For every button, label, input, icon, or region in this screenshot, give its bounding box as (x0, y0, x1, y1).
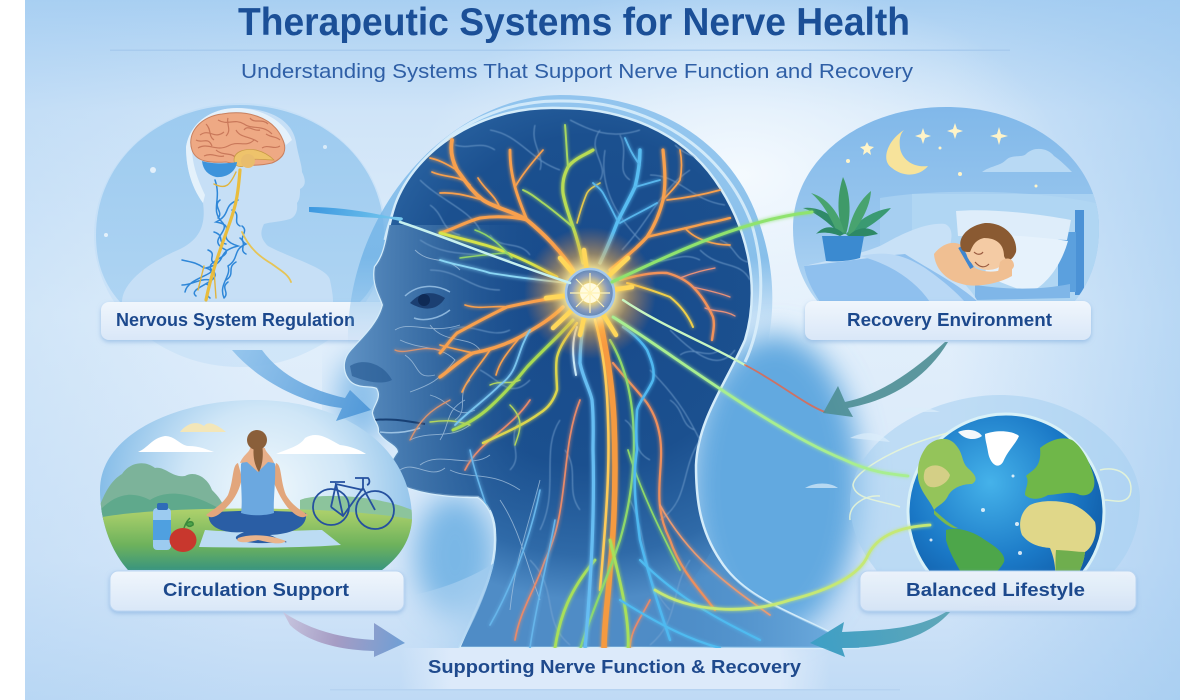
outer skull halo (348, 95, 772, 400)
moon (886, 130, 928, 175)
title divider (110, 50, 1010, 51)
apple (170, 518, 196, 552)
orbit lines (850, 433, 1131, 520)
cloud (982, 149, 1072, 172)
label: recovery environment (805, 301, 1091, 340)
nose and lip contours (350, 362, 392, 383)
blanket (804, 224, 978, 302)
subtitle: Understanding Systems That Support Nerve Function and Recovery (241, 60, 914, 83)
right shoulder shading (640, 550, 860, 648)
panel: circulation support (95, 395, 420, 611)
hub core ring (566, 269, 614, 317)
beam: second green into neck (623, 300, 745, 365)
clouds (180, 423, 226, 432)
green and yellow nerves (430, 125, 693, 650)
eye (410, 293, 445, 309)
label: circulation support (110, 571, 404, 611)
orange nerves (395, 140, 770, 650)
water bottle (153, 503, 171, 550)
bottom caption banner: Supporting Nerve Function & Recovery (428, 657, 801, 677)
beam: green to recovery (612, 212, 812, 282)
europe (1025, 438, 1094, 499)
label: balanced lifestyle: Balanced Lifestyle (906, 580, 1085, 600)
beam: pale blue into hub (400, 222, 570, 283)
human silhouette (122, 108, 333, 302)
hub glow (524, 227, 656, 359)
blue nerves (440, 138, 760, 650)
arrow: balanced to bottom (810, 612, 950, 657)
bottom caption banner (330, 648, 900, 690)
beam: blue to nervous panel (310, 208, 402, 220)
mattress (975, 284, 1070, 300)
plant (803, 177, 891, 238)
stars (846, 123, 1038, 188)
spinal nerves (182, 170, 291, 300)
sleeping person (934, 243, 1012, 286)
meditating figure (206, 430, 308, 543)
scene circle (790, 100, 1102, 310)
label: circulation support: Circulation Support (163, 580, 349, 600)
scene circle (94, 103, 386, 367)
pillows (956, 210, 1071, 240)
panel: recovery environment (790, 100, 1102, 340)
panel: balanced lifestyle (805, 395, 1140, 611)
label: nervous system regulation (101, 302, 391, 340)
globe (906, 412, 1106, 571)
scene circle (95, 395, 420, 575)
label: nervous system regulation: Nervous System Regulation (116, 310, 355, 330)
africa (1020, 501, 1096, 585)
plant pot (822, 236, 864, 261)
meadow (98, 508, 415, 575)
arrow: nervous to head (232, 350, 371, 421)
hub rays (546, 250, 632, 335)
facial thin nerves (395, 250, 540, 610)
bicycle (313, 478, 394, 529)
bedroom wall (880, 192, 1026, 240)
brain (191, 113, 285, 177)
left shoulder (397, 563, 494, 648)
arrow: circulation to bottom (283, 612, 405, 657)
south america (946, 528, 1004, 570)
panel: nervous system regulation (90, 100, 391, 367)
blanket mat (199, 530, 341, 548)
beam: yellow green to balanced (655, 525, 930, 609)
greenland (985, 431, 1019, 466)
trees (100, 463, 225, 515)
beam: red spark (745, 365, 825, 412)
label: balanced lifestyle (860, 571, 1136, 611)
connecting beams (310, 208, 930, 609)
label: recovery environment: Recovery Environment (847, 310, 1052, 330)
fine background nerves (420, 120, 750, 645)
globe backdrop (850, 395, 1140, 575)
beam: green to globe (613, 317, 908, 476)
north america (918, 439, 976, 510)
central head with nerve network (340, 95, 860, 650)
network points (930, 474, 1022, 555)
face shading (344, 225, 491, 510)
small clouds (805, 408, 940, 488)
arrow: recovery to head (823, 342, 948, 417)
head silhouette (345, 108, 860, 648)
title: Therapeutic Systems for Nerve Health (238, 1, 910, 44)
